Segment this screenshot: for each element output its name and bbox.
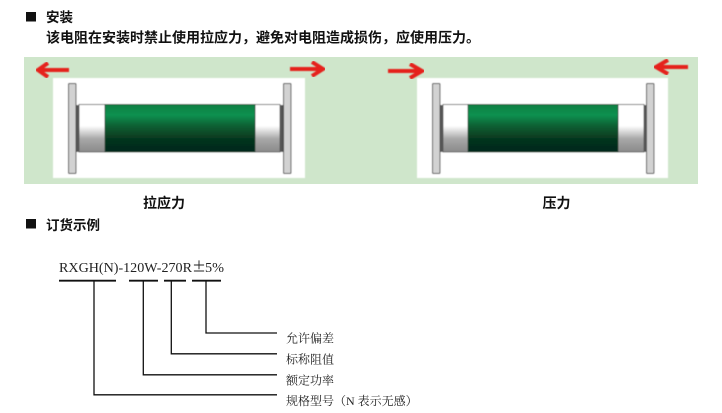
- panel: tension resistor: [53, 78, 305, 178]
- heading: installation: [26, 9, 73, 25]
- label: tolerance: 允许偏差: [286, 330, 334, 345]
- arrow: pull left: [38, 63, 69, 77]
- heading: installation: 安装: [46, 9, 73, 25]
- label: compression: 压力: [542, 195, 570, 211]
- label: nominal resistance: 标称阻值: [286, 351, 334, 366]
- label: rated power: 额定功率: [286, 373, 334, 388]
- label: model specification: 规格型号（N 表示无感）: [286, 393, 418, 408]
- panel: green background: [24, 57, 698, 184]
- text: model number: 5%: [205, 261, 224, 276]
- text: installation note: 该电阻在安装时禁止使用拉应力，避免对电阻造成损伤，应使用压力。: [46, 30, 480, 46]
- text: model number: RXGH(N)-120W-270R: [59, 261, 193, 276]
- panel: compression resistor: [417, 78, 668, 178]
- arrow: push right: [388, 64, 422, 78]
- arrow: push left: [656, 60, 688, 74]
- diagram: leader lines: [59, 281, 277, 395]
- heading: order example: 订货示例: [46, 217, 100, 233]
- text: model number: ±: [192, 257, 206, 277]
- label: tension: 拉应力: [143, 195, 185, 211]
- heading: order example: [26, 217, 100, 233]
- arrow: pull right: [290, 62, 323, 76]
